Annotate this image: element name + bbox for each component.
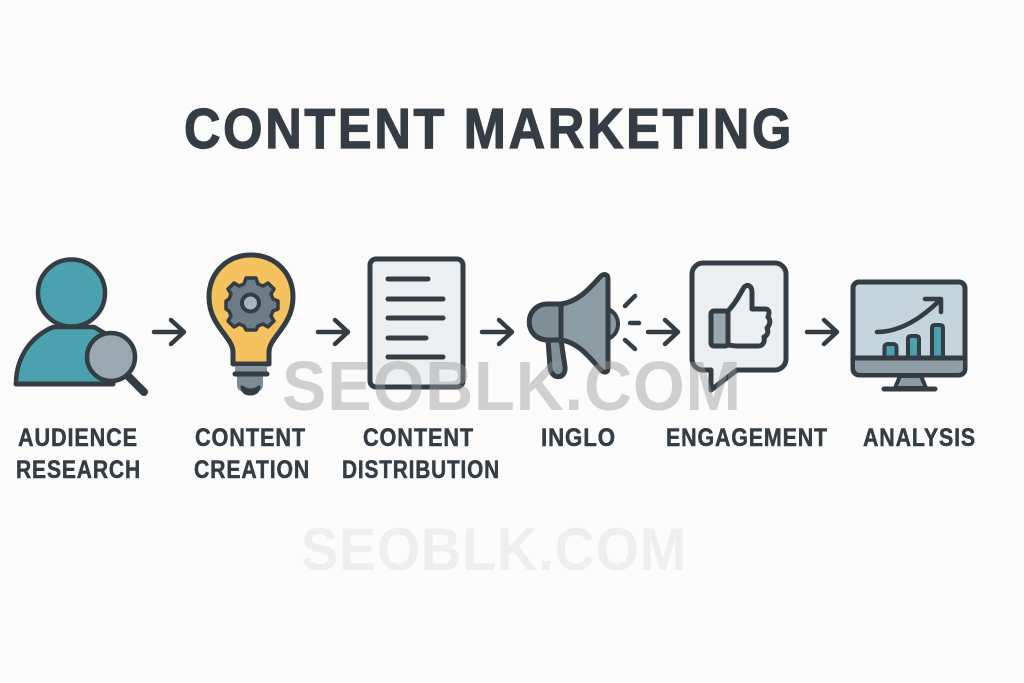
icon: monitor with chart <box>853 282 965 389</box>
label: content distribution: CONTENT <box>363 424 474 452</box>
watermark: large: SEOBLK.COM <box>282 347 742 425</box>
arrow 2 <box>318 320 348 344</box>
label: analysis: ANALYSIS <box>863 424 976 452</box>
label: audience research <box>16 424 141 484</box>
arrow 3 <box>482 320 512 344</box>
watermark: faint: SEOBLK.COM <box>301 516 687 583</box>
label: content creation: CREATION <box>194 456 310 484</box>
label: content creation: CONTENT <box>195 424 306 452</box>
label: content distribution <box>342 424 500 484</box>
gear <box>226 278 278 330</box>
label: content creation <box>194 424 310 484</box>
icon: megaphone <box>529 275 639 377</box>
label: content distribution: DISTRIBUTION <box>342 456 500 484</box>
arrow 1 <box>154 320 184 344</box>
icon: document <box>370 259 463 387</box>
label: audience research: RESEARCH <box>16 456 141 484</box>
icon: audience research person with magnifier <box>16 260 144 392</box>
title: CONTENT MARKETING <box>184 97 794 161</box>
label: inglo: INGLO <box>541 424 616 452</box>
arrow 4 <box>648 320 678 344</box>
label: audience research: AUDIENCE <box>18 424 138 452</box>
arrow 5 <box>807 320 837 344</box>
label: engagement: ENGAGEMENT <box>666 424 828 452</box>
labels <box>16 424 976 484</box>
icon: speech bubble with thumbs up <box>692 263 786 390</box>
icon: light bulb with gear <box>209 255 293 394</box>
